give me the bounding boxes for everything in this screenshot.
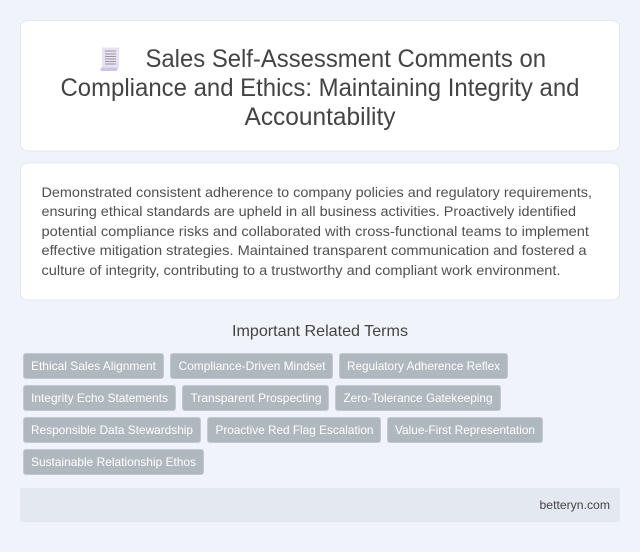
description text: culture of integrity, contributing to a trustworthy and compliant work environment. — [42, 262, 560, 278]
tags: related terms: Value-First Representation — [395, 423, 535, 437]
title: Accountability — [244, 103, 396, 131]
tags: related terms: Regulatory Adherence Reflex — [347, 359, 500, 373]
title: Sales Self-Assessment Comments on — [146, 45, 546, 73]
tags: related terms: Integrity Echo Statements — [31, 391, 168, 405]
title: Compliance and Ethics: Maintaining Integrity and — [60, 74, 580, 102]
heading: important related terms: Important Related Terms — [232, 323, 408, 340]
description text: ensuring ethical standards are upheld in all business activities. Proactively identified — [42, 203, 576, 219]
tags: related terms: Sustainable Relationship Ethos — [31, 455, 196, 469]
tags: related terms: Proactive Red Flag Escalation — [216, 423, 374, 437]
title — [60, 45, 580, 131]
tags: related terms: Zero-Tolerance Gatekeeping — [344, 391, 492, 405]
footer — [20, 488, 620, 522]
tags: related terms: Ethical Sales Alignment — [31, 359, 157, 373]
description text: potential compliance risks and collaborated with cross-functional teams to implement — [42, 223, 589, 239]
tags: related terms: Transparent Prospecting — [190, 391, 322, 405]
tags: related terms: Responsible Data Stewardship — [31, 423, 193, 437]
description text: effective mitigation strategies. Maintained transparent communication and fostered a — [42, 242, 587, 258]
tags: related terms: Compliance-Driven Mindset — [178, 359, 326, 373]
panel: description card — [20, 163, 620, 300]
icon: document scroll — [100, 48, 119, 71]
footer credit: betteryn.com — [540, 498, 610, 512]
tags: related terms — [24, 354, 542, 474]
description text: Demonstrated consistent adherence to company policies and regulatory requirements, — [42, 184, 592, 200]
description text — [42, 184, 592, 278]
panel: title card — [20, 20, 620, 151]
